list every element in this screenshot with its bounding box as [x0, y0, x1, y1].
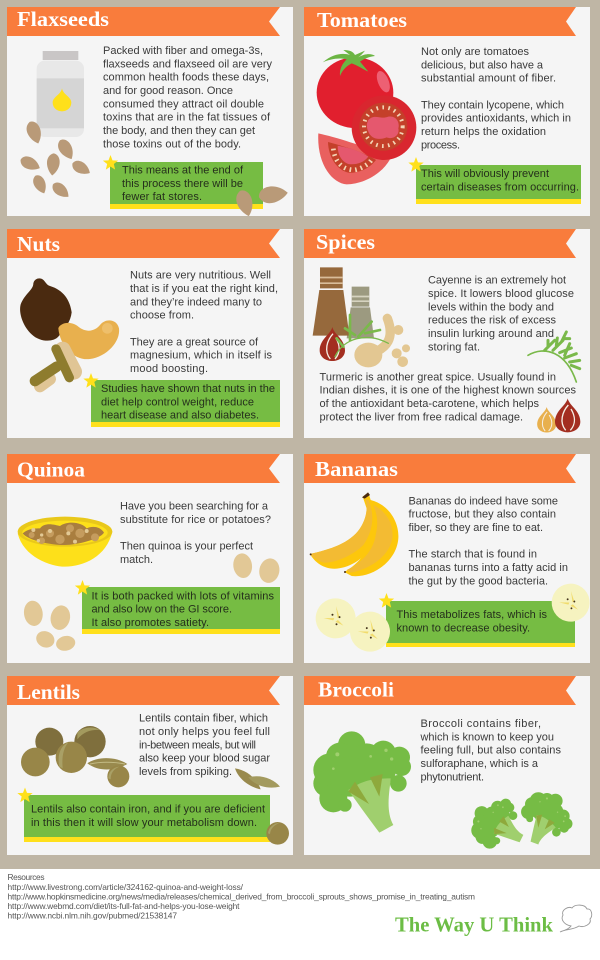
callout: This will obviously prevent	[421, 168, 549, 180]
body text: Then quinoa is your perfect	[120, 541, 253, 553]
panel: flaxseeds	[7, 7, 293, 218]
callout	[416, 165, 581, 204]
resources	[8, 872, 475, 921]
body text: in-between meals, but will	[139, 739, 256, 751]
callout: fewer fat stores.	[122, 191, 202, 203]
body text: Have you been searching for a	[120, 501, 269, 513]
body text: turmeric: protect the liver from free radical damage.	[320, 411, 523, 423]
body text: bananas turns into a fatty acid in	[408, 562, 568, 574]
icon: star	[75, 580, 90, 595]
body text: consumed they attract oil double	[103, 98, 264, 110]
heading ribbon: Spices: Spices	[316, 230, 375, 254]
callout: It is both packed with lots of vitamins	[92, 590, 274, 602]
icon: tomatoes	[317, 50, 416, 184]
body text: that is if you eat the right kind,	[130, 283, 278, 295]
icon: broccoli	[313, 731, 581, 862]
body text: cayenne: insulin lurking around and	[428, 328, 554, 340]
body text: the gut by the good bacteria.	[408, 575, 548, 587]
body text: and for good reason. Once	[103, 85, 233, 97]
logo: The Way U Think	[395, 905, 592, 937]
icon: chili flames	[537, 398, 580, 432]
body text: those toxins out of the body.	[103, 138, 241, 150]
heading ribbon: Lentils	[7, 676, 280, 705]
resources: http://www.ncbi.nlm.nih.gov/pubmed/21538147	[8, 911, 177, 921]
icon: leaves	[235, 768, 280, 789]
icon: large seeds	[232, 181, 289, 218]
body text: fructose, but they also contain	[408, 509, 556, 521]
callout: This metabolizes fats, which is	[396, 609, 548, 621]
callout: Lentils also contain iron, and if you are deficient	[31, 804, 265, 816]
heading ribbon: Nuts	[7, 229, 280, 258]
body text	[130, 270, 278, 375]
body text: cayenne: storing fat.	[428, 341, 480, 353]
body text	[103, 45, 272, 150]
heading ribbon: Spices	[304, 229, 576, 258]
body text: levels from spiking.	[139, 766, 232, 778]
body text: turmeric: Turmeric is another great spice. Usually found in	[320, 371, 556, 383]
resources: http://www.livestrong.com/article/324162-quinoa-and-weight-loss/	[8, 882, 244, 892]
body text: They contain lycopene, which	[421, 99, 564, 111]
body text: substantial amount of fiber.	[421, 73, 556, 85]
body text: Broccoli contains fiber,	[420, 718, 541, 730]
logo: The Way U Think: The Way U Think	[395, 913, 553, 937]
callout	[82, 587, 280, 634]
body text: common health foods these days,	[103, 72, 269, 84]
body text: cayenne: Cayenne is an extremely hot	[428, 275, 566, 287]
body text: turmeric: of the antioxidant beta-carotene, which helps	[320, 398, 540, 410]
panel: bananas	[304, 454, 592, 663]
icon: oil bottle	[37, 51, 84, 137]
body text: turmeric	[320, 371, 576, 423]
icon: spices	[313, 267, 410, 367]
heading ribbon: Nuts: Nuts	[17, 232, 60, 256]
body text: which is known to keep you	[420, 731, 554, 743]
body text	[421, 46, 571, 151]
callout: this process there will be	[122, 178, 243, 190]
body text: the body, and then they can get	[103, 125, 255, 137]
body text: match.	[120, 554, 153, 566]
heading ribbon: Broccoli: Broccoli	[318, 678, 394, 702]
body text: Lentils contain fiber, which	[139, 713, 268, 725]
callout: in this then it will slow your metabolism down.	[31, 817, 257, 829]
body text: phytonutrient.	[420, 771, 484, 783]
callout: known to decrease obesity.	[396, 622, 530, 634]
callout	[386, 601, 575, 647]
body text: feeling full, but also contains	[420, 745, 562, 757]
icon: quinoa bowl	[18, 517, 112, 567]
body text: The starch that is found in	[408, 549, 537, 561]
body text: cayenne	[428, 275, 574, 353]
panel: spices	[304, 229, 590, 438]
body text: magnesium, which in itself is	[130, 350, 272, 362]
icon: quinoa seeds	[22, 552, 282, 653]
callout: certain diseases from occurring.	[421, 182, 579, 194]
body text: process.	[421, 139, 460, 151]
icon: banana slices	[313, 581, 592, 654]
body text: Not only are tomatoes	[421, 46, 530, 58]
body text	[420, 718, 562, 783]
callout: This means at the end of	[122, 164, 244, 176]
body text: flaxseeds and flaxseed oil are very	[103, 58, 272, 70]
heading ribbon: Tomatoes	[304, 7, 576, 36]
heading ribbon: Flaxseeds	[7, 7, 280, 36]
body text: and they’re indeed many to	[130, 296, 262, 308]
panel: lentils	[7, 676, 293, 855]
body text: sulforaphane, which is a	[420, 758, 539, 770]
heading ribbon: Tomatoes: Tomatoes	[317, 8, 407, 32]
body text: Bananas do indeed have some	[408, 495, 558, 507]
icon: star	[17, 788, 33, 802]
callout: Studies have shown that nuts in the	[101, 383, 275, 395]
body text: substitute for rice or potatoes?	[120, 514, 271, 526]
body text: Nuts are very nutritious. Well	[130, 270, 271, 282]
resources: http://www.hopkinsmedicine.org/news/media/releases/chemical_derived_from_broccoli_sprouts_shows_promise_in_treating_autism	[8, 892, 475, 902]
icon: nuts	[20, 278, 119, 386]
callout: diet help control weight, reduce	[101, 396, 254, 408]
body text: cayenne: levels within the body and	[428, 301, 554, 313]
icon: herb	[528, 332, 580, 382]
body text: cayenne: spice. It lowers blood glucose	[428, 288, 574, 300]
heading ribbon: Quinoa	[7, 454, 280, 483]
body text: Packed with fiber and omega-3s,	[103, 45, 263, 57]
panel: nuts	[7, 229, 293, 438]
body text: mood boosting.	[130, 363, 208, 375]
icon: bananas	[310, 492, 398, 576]
body text	[120, 501, 271, 566]
body text	[408, 495, 568, 587]
callout: It also promotes satiety.	[92, 617, 209, 629]
callout: and also low on the GI score.	[92, 604, 232, 616]
panel: broccoli	[304, 676, 590, 862]
icon: flax seeds	[19, 119, 92, 199]
icon: star	[83, 373, 99, 388]
heading ribbon: Broccoli	[304, 676, 576, 705]
body text: toxins that are in the fat tissues of	[103, 112, 271, 124]
icon: star	[379, 593, 394, 608]
panel: quinoa	[7, 454, 293, 663]
heading ribbon: Lentils: Lentils	[17, 680, 80, 704]
callout	[91, 380, 280, 427]
heading ribbon: Bananas	[304, 454, 576, 483]
heading ribbon: Bananas: Bananas	[315, 457, 398, 481]
icon: star	[103, 155, 118, 170]
icon: lentils	[21, 726, 129, 787]
callout: heart disease and also diabetes.	[101, 410, 259, 422]
body text: delicious, but also have a	[421, 59, 544, 71]
body text: choose from.	[130, 310, 194, 322]
callout	[24, 795, 270, 842]
body text: They are a great source of	[130, 336, 259, 348]
body text: turmeric: Indian dishes, it is one of the highest known sources	[320, 385, 576, 397]
body text: also keep your blood sugar	[139, 753, 270, 765]
icon: star	[408, 157, 424, 172]
panel: tomatoes	[304, 7, 590, 216]
icon: lentil	[266, 822, 289, 845]
body text: cayenne: reduces the risk of excess	[428, 315, 556, 327]
heading ribbon: Flaxseeds: Flaxseeds	[17, 7, 109, 31]
resources: Resources	[8, 872, 44, 882]
body text: not only helps you feel full	[139, 726, 270, 738]
body text: return helps the oxidation	[421, 126, 546, 138]
body text	[139, 713, 270, 778]
body text: fiber, so they are fine to eat.	[408, 522, 543, 534]
heading ribbon: Quinoa: Quinoa	[17, 458, 86, 482]
callout	[110, 162, 263, 209]
body text: provides antioxidants, which in	[421, 113, 571, 125]
resources: http://www.webmd.com/diet/its-full-fat-and-helps-you-lose-weight	[8, 901, 240, 911]
